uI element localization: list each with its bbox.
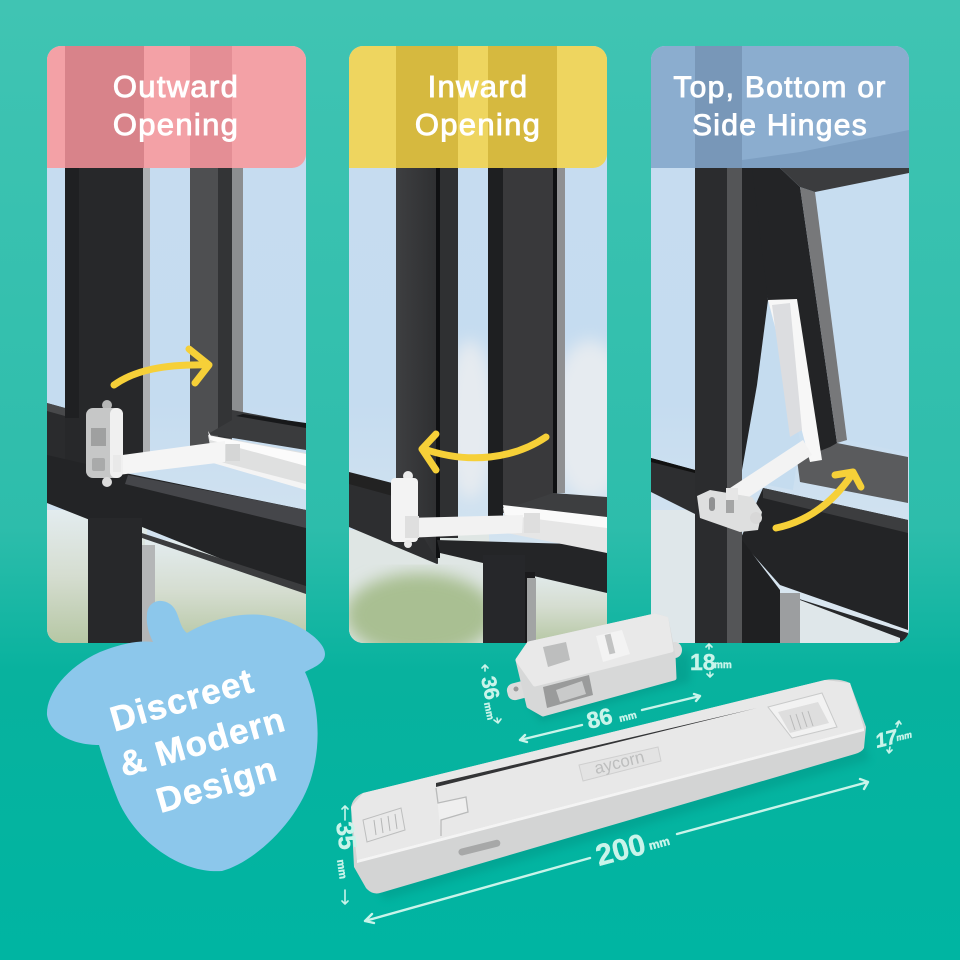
dimension: 86 mm: 86 [584,702,615,734]
logo plate: aycorn [592,747,646,778]
acorn text [102,656,303,828]
dimension: 200 mm [365,779,868,923]
dimension: 86 mm [520,694,700,742]
acorn text: & Modern [115,700,290,785]
product: large slide bar [351,679,870,900]
dimension: 17 mm [873,721,913,753]
acorn badge [47,601,325,871]
dimension: 17 mm: mm [895,729,913,743]
header: inward opening [349,46,607,168]
hinge [436,788,468,836]
dimension: 18 mm: mm [714,660,732,671]
dimension: 36 mm: mm [481,701,496,721]
dimension: 35 mm: 35 [330,820,362,851]
bracket: top hinge [697,299,822,532]
dimension: 17 mm: 17 [873,726,901,753]
arrow: inward [422,434,546,470]
logo plate [579,747,661,781]
bracket: outward opening [86,400,306,490]
header: top, bottom or side hinges [651,46,909,168]
arrow: top hinge [776,472,861,528]
oval slot [458,839,501,856]
right slider [768,693,837,738]
dimension: 200 mm: mm [647,834,671,853]
panel: outward opening [47,46,306,643]
dimension: 35 mm: mm [334,859,349,880]
header: outward opening: Outward [113,69,239,104]
dimension: 18 mm: 18 [690,649,716,675]
dimension: 86 mm: mm [618,710,638,725]
header: top, bottom or side hinges: Side Hinges [692,109,868,142]
header: inward opening: Opening [415,107,541,142]
header: outward opening: Opening [113,107,239,142]
acorn text: Discreet [106,661,259,739]
header: outward opening [47,46,306,168]
header: inward opening: Inward [428,69,528,104]
dimension: 200 mm: 200 [592,828,649,873]
header: top, bottom or side hinges: Top, Bottom or [673,71,887,104]
arrow: outward [114,349,209,385]
panel: inward opening [349,46,607,643]
acorn text: Design [152,749,282,821]
bracket: inward opening [391,471,607,553]
dimension: 36 mm [476,665,503,723]
left slider [363,808,405,842]
product: small bracket [505,616,690,722]
dimension: 35 mm [330,806,362,904]
panel: top, bottom or side hinges [651,46,909,643]
dimension: 36 mm: 36 [476,674,503,702]
dimension: 18 mm [690,644,732,677]
